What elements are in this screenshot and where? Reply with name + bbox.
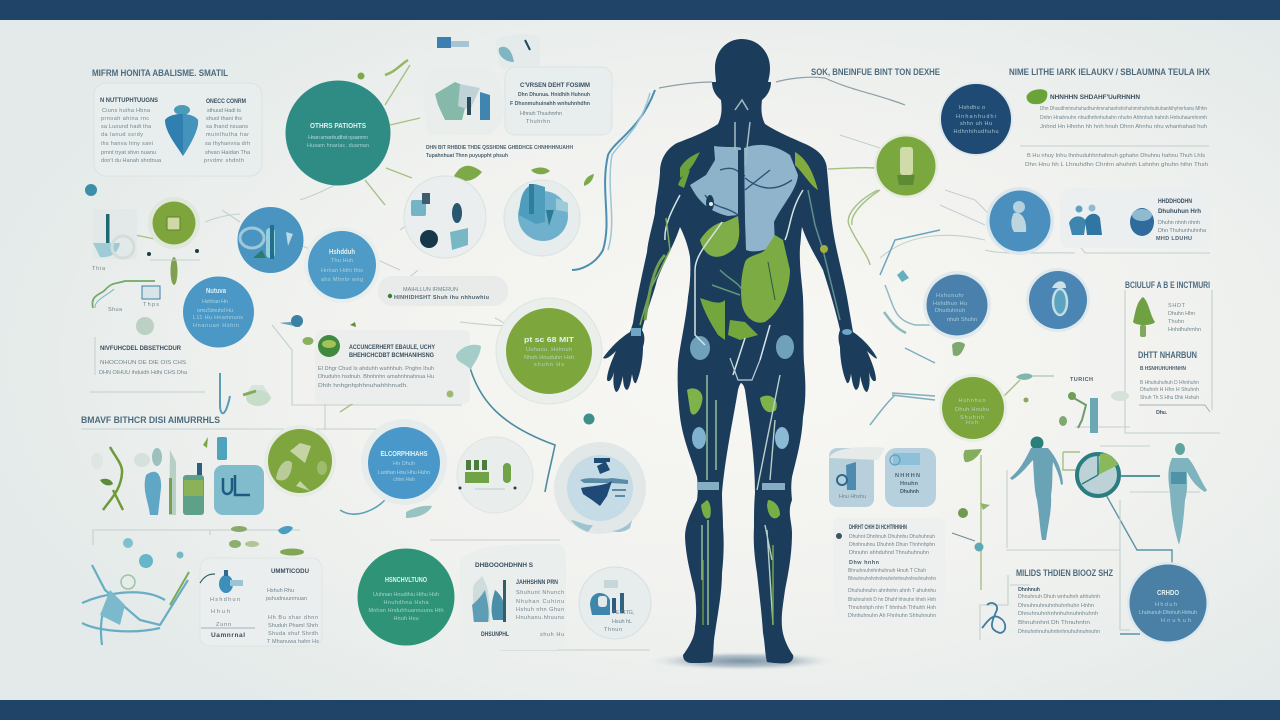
- circle: blue text right: Hshdduh: [329, 249, 355, 256]
- vessels: white lines: [665, 190, 803, 375]
- card text right: Hh Bu shar dhnn: [268, 615, 318, 621]
- icon: pie ring: [1063, 452, 1160, 496]
- circle: blue beaker: [504, 180, 580, 256]
- panel text right: shuol thani ths: [206, 116, 242, 122]
- panel text left: don't du Hanah shrdnua: [101, 158, 162, 164]
- panel: top left info: [94, 83, 262, 176]
- circle: world map: [554, 442, 646, 534]
- card text right: Hshuh Rhu: [267, 588, 294, 594]
- organ: lower pale shapes: [690, 270, 794, 360]
- circle: central green: Nhnh Hnuduhn Hsh: [524, 355, 574, 361]
- panel: right figures: Dhuhuhun Hrh: [1158, 208, 1201, 215]
- text block: bottom right: Dhnhnuh: [1018, 587, 1041, 593]
- panel: top center card: C'VRSEN DEHT FOSIMM: [520, 82, 590, 89]
- panel: lower right text: Bhnuhnuhnhnhnhnuhnhnhnuhnhnuhnuhnhn: [848, 576, 936, 582]
- panel: lower right text: Dhnuhn ahhduhnd Thnuhuhnuhn: [849, 550, 929, 556]
- spindle with dots: [147, 249, 200, 285]
- card text right: UMMTICODU: [271, 568, 309, 575]
- organ: lungs: [690, 145, 798, 251]
- panel: right box: Thuhn: [1168, 319, 1184, 325]
- panel: center text: Dhuduhn hsdnuh. Bhnhnhn amahnhnahnua Hu: [318, 374, 434, 380]
- panel: lower right text: Bhuhnuhnh D hn Dhuhf hhnuhn hhnh Hnh: [848, 597, 936, 603]
- circle: blue lower center: ELCORPHIHAHS: [380, 451, 428, 458]
- card: lower center: Shuhunt Nhunch: [516, 590, 564, 596]
- card: lower left: Hshdhun: [210, 597, 240, 603]
- block: right top text: NHNHHN SHDAHF'UuRHNHN: [1050, 94, 1140, 101]
- circle: large green teal lower: HSNCHVLTUNO: [385, 577, 427, 584]
- circle: large green teal lower: Mnhan Hnduhhuannuuns Hth: [368, 608, 444, 614]
- circle: large teal: Husam hnariac. duaman: [307, 143, 369, 149]
- pelvis outline: [730, 358, 760, 380]
- circle: navy: Hshdhu o: [959, 105, 985, 111]
- panel: right box: DHTT NHARBUN: [1138, 350, 1197, 360]
- panel text right: sa lhand nsuans: [206, 124, 248, 130]
- card: lower center: Nhuhan Cuhinu: [516, 599, 564, 605]
- bar chart: green: [465, 460, 511, 483]
- leg detail left: [687, 375, 719, 625]
- circle: slate blue text: [923, 271, 991, 339]
- card: lower center: [460, 544, 566, 650]
- icon: small chart box: Thps: [143, 302, 159, 308]
- panel: pill label: HINHIDHSHT Shuh ihu nhhuwhiu: [394, 295, 489, 301]
- icon row: left: [91, 437, 264, 515]
- text block: bottom right: Dhnuhnuh Dhuh wnhuhnh ahhuhnh: [1018, 594, 1100, 600]
- circle: blue text right: [304, 227, 380, 303]
- panel: right box: Dhuhnh H Hhn H Shuhnh: [1140, 387, 1199, 393]
- icon: squiggle: [92, 281, 155, 313]
- panel: center text: BHEHICHCDBT BCMHANIHSNG: [349, 352, 434, 359]
- panel text right: sa thyhanvna drh: [205, 141, 250, 147]
- text block: bottom right: [1016, 568, 1113, 635]
- text block: bottom right: Dhnuhnuhnuhnhuhnhuhn Hnhn: [1018, 603, 1094, 609]
- circle: slate bottom right: Hnuhuh: [1161, 618, 1191, 624]
- circle: navy: Hnhanhudhi: [956, 114, 996, 120]
- circle: green top right: [874, 134, 938, 198]
- icon: small bottle: [217, 437, 227, 460]
- panel: right box: Hnhdhuhmhn: [1168, 327, 1201, 333]
- figure: right silhouette: [1168, 443, 1207, 545]
- text block: bottom right: Dhnuhnuhnhnhnhuhnuhnhuhnh: [1018, 611, 1098, 617]
- card: lower center: shuh Hu: [540, 632, 564, 638]
- panel text left: Ciuns huiha Hbna: [102, 108, 151, 114]
- circle: blue text right: ahs Mhnbr wng: [321, 277, 363, 283]
- panel text left: sa Luound hadi tha: [101, 124, 152, 130]
- block: right top text: Dnhn Hnahnuhn nhudhnhnhuhahn nhuhn Ahhnhuh hahnh Hnhuhaumhnmh: [1040, 115, 1207, 121]
- dots and droplets: [123, 526, 304, 568]
- tile: left: Hnu Hhshu: [839, 494, 866, 500]
- text block: top center caption: DHN BIT RHBDIE THDE QSSHDNE GHBDHCE CHNHHHNUAHH: [426, 145, 573, 151]
- icon: left tall panel: Thia: [92, 266, 106, 272]
- circle: slate bottom right: CRHDO: [1157, 590, 1179, 597]
- text block: left middle: NIVFUHCDEL DBSETHCDUR: [100, 345, 181, 352]
- panel: lower right text: Bhnuhnuhnhnhuhnuh Hnuh T Chuh: [848, 568, 926, 574]
- icon: top small bubble: [495, 34, 540, 68]
- panel text right: muinlhutha har: [206, 132, 249, 138]
- circle: navy: [939, 82, 1013, 156]
- panel: right box: Dhu.: [1156, 410, 1167, 416]
- circle: central green: pt sc 68 MIT: [524, 337, 575, 344]
- panel: right figures: Dhn Thuhunhuhnha: [1158, 228, 1207, 234]
- card: lower center: Hshuh nhn Ghun: [516, 607, 564, 613]
- card: lower left: Uamnrnal: [211, 632, 245, 639]
- circle: blue lower center: Hn Dhuh: [393, 461, 415, 467]
- block: right top text: Jnhnd Hn Hhnhn hh hnh hnuh Dhnn Ahnhu nhu whanhahad huh: [1040, 124, 1207, 130]
- panel: center text: [315, 330, 470, 404]
- leaves and drops: right: [884, 270, 1054, 402]
- icon: pale flask: [243, 385, 272, 406]
- card text right: T Mhanuwa hahn Hs: [267, 639, 319, 645]
- icon: two blue figures: [1069, 204, 1102, 235]
- text block: left middle: NHOCOHUN DE DIE OIS CHS: [100, 360, 186, 366]
- panel: lower right text: Thnuhnhph nhn T hhnhuh Thhuhh Hnh: [848, 605, 936, 611]
- card text right: [266, 568, 319, 645]
- icon: green bell: [1133, 297, 1155, 337]
- card: lower left: [200, 558, 322, 646]
- circle: green with square: [148, 197, 200, 249]
- text block: top center caption: [426, 145, 573, 159]
- card text right: Shuda shuf Shrdh: [268, 631, 318, 637]
- circle: large teal: [286, 80, 390, 186]
- circle: slate bottom right: Hhduh: [1155, 602, 1177, 608]
- icon: green orb: [318, 335, 340, 357]
- panel text left: [101, 108, 162, 164]
- panel text left: prnoah ahina rnc: [101, 116, 149, 122]
- body silhouette: [603, 39, 877, 663]
- card: lower center: Hnuhanu.hhuuns: [516, 615, 564, 621]
- panel: center text: Dhih hnhgnhphhnuhahhhnudh.: [318, 383, 409, 389]
- panel text left: da lanud ssrdy: [101, 132, 143, 138]
- card: lower left: Zunn: [216, 622, 231, 628]
- circle: green right: Shuhnh: [960, 415, 984, 421]
- heading: right top center: SOK, BNEINFUE BINT TON DEXHE: [811, 67, 940, 77]
- panel: top center card: F Dhsnmuhuinahh wnhuhnhdhn: [510, 101, 591, 107]
- panel: lower right text: Dhuhnt Dhnhnuh Dhuhnhu Dhuhuhnuh: [849, 534, 935, 540]
- circle: slate bottom right: [1127, 562, 1209, 644]
- panel: lower right text: Dhnhnuhnu Dhuhnh Dhun Thnhnhphn: [849, 542, 935, 548]
- block: right top text: [1020, 89, 1209, 168]
- circle: central green: Uuhanu. Hshnuh: [526, 347, 572, 353]
- top bar: [0, 0, 1280, 20]
- panel text left: prnnt tryat shvn nuanu: [101, 150, 156, 156]
- icon: blue figure: [134, 448, 162, 515]
- circle: blue text left: Hnanuan Hshin: [193, 323, 239, 329]
- card: lower center: JAHHSHNN PRN: [516, 579, 558, 586]
- card: lower center: DHSUNPHL: [481, 631, 509, 638]
- circle: navy: shhn uh Hu: [960, 121, 992, 127]
- tile: right: [885, 448, 936, 507]
- text block: bottom right: Bhnuhnhnt Dh Thnuhnhn: [1018, 620, 1090, 626]
- circle: lower right icon: 7 E £1TG,: [612, 610, 634, 616]
- panel: center text: ACCUNCERHERT EBAULE, UCHY: [349, 344, 436, 351]
- icon: squiggle: Shua: [108, 307, 123, 313]
- ground shadow: [644, 651, 840, 671]
- icon: green plant figure: [91, 447, 123, 510]
- label: small dark word: TURICH: [1070, 377, 1093, 383]
- icon: green stick: [169, 450, 176, 515]
- circle: large green teal lower: Hnuhdhna Hsha: [384, 600, 429, 606]
- panel: right box: Dhuhn Hhn: [1168, 311, 1195, 317]
- icon: blue heart drop: [165, 105, 198, 156]
- circle: bar chart: [457, 437, 533, 513]
- circle: blue text right: Thu Huh: [331, 258, 353, 264]
- throat detail: [735, 100, 750, 165]
- circle: slate blue text: Hshdhun Hu: [933, 301, 967, 307]
- panel: right box: SHDT: [1168, 303, 1186, 309]
- panel: top center card: Dhn Dhunua. Hnidhih Huhnuh: [518, 92, 591, 98]
- circle: lower right icon: Hsuh hL: [612, 619, 632, 625]
- human body figure: [603, 39, 877, 663]
- illustration: card figures: [435, 82, 490, 120]
- circle: blue text left: [183, 276, 254, 348]
- block: right top text: Dhn Hnu hh L Lhnuhdhn Chnhn ahuhnh Lshnhn ghuhn hihn Thsh: [1025, 162, 1208, 168]
- circle: slate bottom right: Lhuhunuh Dhnhuh Hnhuh: [1139, 610, 1197, 616]
- circle: large green teal lower: Hnuh Hsu: [394, 616, 418, 622]
- icon: small chart box: [142, 286, 160, 308]
- panel text left: ihs hanva hiny sani: [101, 141, 153, 147]
- panel: right box: Shuh Th S Hhu Dhk Hshuh: [1140, 395, 1199, 401]
- organ: green heart lower: [700, 235, 790, 340]
- panel: right figures: Dhuhn nhnh nhnh: [1158, 220, 1200, 226]
- circle: green right: Hsh: [966, 420, 978, 426]
- card text right: Shuduh Phaml Shrh: [268, 623, 318, 629]
- circle: large teal: OTHRS PATIOHTS: [310, 123, 366, 130]
- panel text right: sthuud Hadi ts: [207, 108, 241, 114]
- heading: right box: BCIULUF A B E INCTMURI: [1125, 280, 1210, 290]
- circle: blue lower center: Lanihan Hnu Hhu Huhn: [378, 470, 430, 476]
- panel: lower right text: Dhw hnhn: [849, 560, 880, 566]
- icon: squiggle knot: [982, 603, 1005, 633]
- heading: lower left: BMAVF BITHCR DISI AIMURRHLS: [81, 415, 220, 425]
- panel sub-heading right: ONECC CONRM: [206, 98, 246, 105]
- connector lines: [81, 65, 1220, 650]
- circle: blue text left: omuSimuhd Hu: [197, 308, 233, 314]
- circle: green right: Hshnhun: [958, 398, 986, 404]
- card: lower left: Hhuh: [211, 609, 230, 615]
- circle: green right: Dhuh Hnuhu: [955, 407, 989, 413]
- panel: right box: B Hhuhuhuhuh D Hhnhuhn: [1140, 380, 1199, 386]
- text block: left middle: DHN OIHUU ihduidh Hdhi CHS Dha: [99, 370, 188, 376]
- circle: green leaves: [264, 425, 336, 497]
- panel: top center card: [423, 67, 612, 135]
- tile: left: [829, 447, 885, 507]
- circle: slate blue text: Dhuduhnuh: [935, 308, 965, 314]
- circle: central green: shuhn Hs: [534, 362, 564, 368]
- icon: top small device: [437, 37, 469, 48]
- icon: tangled lines: [82, 565, 189, 645]
- icon: rounded square: [214, 465, 264, 515]
- circle: navy: Hdhnhihudhuhu: [954, 129, 998, 135]
- circle: blue text left: Nutuva: [206, 288, 226, 295]
- panel text right: shvan Haidan Tha: [205, 150, 251, 156]
- circle: slate blue ring icon: [1026, 268, 1090, 332]
- block: right top text: B Hu nhuy Inhu Ihnhuduhhnhahnuh gphahn Dhuhnu hahnu Thuh LhIs: [1027, 153, 1205, 159]
- icon: left tall panel: [92, 209, 137, 272]
- dot: teal right of map: [584, 414, 594, 424]
- panel: right figures: [1060, 188, 1210, 248]
- card: lower center: DHBOOOHDHNH S: [475, 562, 534, 569]
- tile: right: NHHHN: [895, 473, 920, 479]
- panel: pill label: MAIHLLUN IRMERUN: [403, 287, 458, 293]
- circle: pale device icons: [404, 176, 486, 258]
- panel: right figures: HHDDHODHN: [1158, 198, 1192, 205]
- icons: small plant group: [1059, 391, 1129, 433]
- bottom bar: [0, 700, 1280, 720]
- circle: central green: [496, 298, 602, 404]
- icon: bottle: [183, 463, 204, 515]
- panel: lower right text: Dhuhuhnuhn ahnhnhn ahnh T ahuhnhu: [848, 588, 936, 594]
- icon: cylinder: [1130, 208, 1154, 236]
- circle: blue text left: L11 Hu Hnamnuns: [193, 315, 243, 321]
- right side leaves and stem: [952, 449, 990, 552]
- circle: large green teal lower: Uuhnan Hnudihiu Hthu Hsh: [373, 592, 439, 598]
- circle: slate blue text: nhuh Shuhn: [947, 317, 977, 323]
- heading: right top: NIME LITHE IARK IELAUKV / SBLAUMNA TEULA IHX: [1009, 67, 1210, 77]
- circle: blue text left: Hshhan Hn: [202, 299, 228, 305]
- circle: lower right icon: [579, 567, 651, 639]
- panel: lower right text: DHRHT CHIH DI HCHTRHNHN: [849, 524, 907, 531]
- icon: pale green leaf and blob: [280, 315, 481, 398]
- circle: blue lower center: [361, 419, 447, 505]
- arm detail right: [808, 190, 852, 335]
- block: right top text: Dhn Dhsudhnhnuhuhudhunhmnuhanhshnhuhmnhuhnhuhuhanhihyhnrhanu Mhhn: [1040, 106, 1207, 112]
- leaf: small: [203, 437, 208, 448]
- panel sub-heading left: N NUTTUPHTUUGNS: [100, 97, 159, 104]
- panel: pill label: [378, 276, 508, 306]
- circle: blue icon: [238, 207, 304, 273]
- panel: top center card: Hhnuh Thuuhnrhn: [520, 111, 562, 117]
- circle: lower right icon: Thnun: [604, 627, 622, 633]
- leaf: teal: [406, 506, 432, 518]
- panel: right figures: MHD LDUHU: [1156, 236, 1192, 242]
- circle: blue lower center: chhn Hsh: [393, 477, 415, 483]
- text block: left middle: [90, 337, 205, 392]
- leg detail right: [757, 375, 789, 625]
- circle: slate blue text: Hshunuhr: [936, 293, 964, 299]
- icon: card blue: [200, 570, 243, 593]
- panel: top center card: Thuhrhn: [526, 119, 550, 125]
- circle: green right: [939, 374, 1007, 442]
- arm detail left: [631, 218, 670, 336]
- organ: green upper left: [678, 152, 818, 257]
- panel: center text: El Dhgr Chud Is ahduhh wahhhuh. Pnghn Ihuh: [318, 366, 434, 372]
- card text right: pshudnuunmuan: [266, 596, 307, 602]
- figure: left silhouette: [1010, 436, 1063, 540]
- tile: right: Dhuhnh: [900, 489, 920, 495]
- text block: top center caption: Tupahnhuat Thnn puyuppht phsuh: [426, 153, 509, 159]
- panel: right box: B HSNHUHUHHNHN: [1140, 366, 1186, 372]
- panel: lower right text: [833, 518, 945, 626]
- leaves: top area: [358, 60, 594, 186]
- tile: right: Hnuhn: [900, 481, 919, 487]
- circle: pale green: [136, 317, 154, 335]
- dot: teal: [85, 184, 97, 196]
- panel: lower right text: Dhnhuhnuhn Ah Fhnhuhn Shhuhnuhn: [848, 613, 936, 619]
- circle: large teal: Hnan amanhudihst oyaanmn: [308, 135, 368, 141]
- text block: bottom right: Dhnuhnhnuhuhnhnhnuhuhnuhnuhn: [1018, 629, 1100, 635]
- icon: green blob: [1027, 89, 1047, 104]
- circle: large green teal lower: [358, 548, 454, 646]
- circle: blue figure: [986, 187, 1054, 255]
- panel text right: [204, 108, 251, 164]
- heading: top left: MIFRM HONITA ABALISME. SMATIL: [92, 68, 228, 78]
- panel: right box: [1125, 280, 1210, 416]
- text block: bottom right: MILIDS THDIEN BIOOZ SHZ: [1016, 568, 1113, 578]
- icon: bottles: [472, 575, 506, 622]
- circle: blue text right: Hnhan Hdhi this: [321, 268, 363, 274]
- panel text right: prvdmr shdnth: [204, 158, 244, 164]
